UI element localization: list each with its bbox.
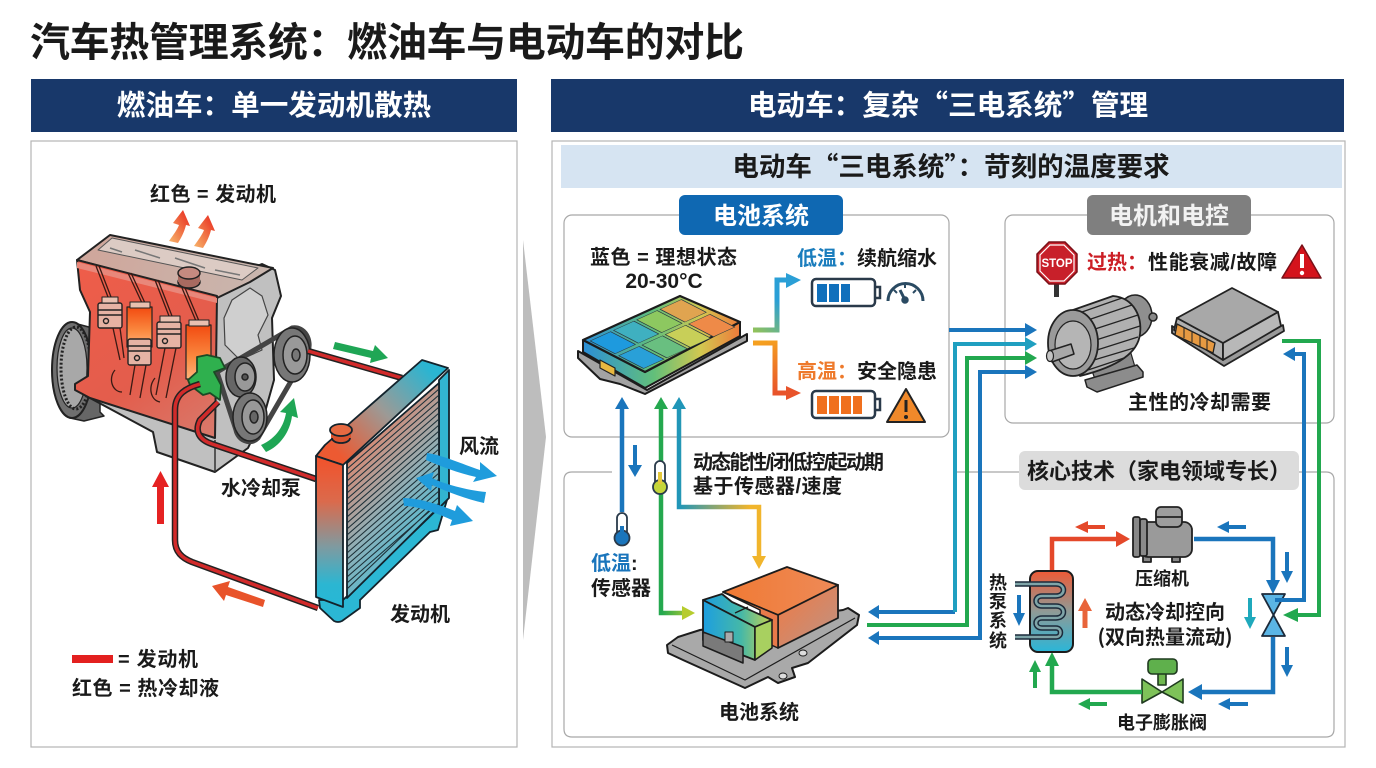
frame: core technology box: [564, 472, 1334, 737]
panel: motor and controller: [1005, 195, 1334, 423]
label: heat pump system: 热: [989, 573, 1007, 593]
label: heat pump system: 统: [989, 630, 1007, 651]
subheader: [561, 145, 1342, 188]
icon: reversing valve: [1262, 594, 1285, 636]
pill: core technology: 核心技术（家电领域专长）: [1027, 454, 1291, 486]
text: ideal state: 蓝色 = 理想状态: [590, 245, 737, 269]
text: high temperature: 高温：: [797, 359, 857, 383]
text: dynamic cooling direction: [1097, 600, 1233, 650]
subheader: 电动车“三电系统”：苛刻的温度要求: [732, 145, 1170, 184]
icon: overheated battery: [812, 391, 880, 418]
header: electric car: [551, 79, 1344, 132]
water pump green: [188, 355, 225, 400]
cylinders: [127, 307, 211, 379]
label: airflow: 风流: [459, 435, 499, 458]
pipe: green to heat exchanger: [1029, 652, 1142, 710]
belt: [217, 328, 309, 442]
label: radiator: 发动机: [390, 603, 450, 626]
arrows: battery to sensors: [615, 397, 766, 620]
text: main cooling need: 主性的冷却需要: [1128, 391, 1271, 414]
text: ideal state: 20-30°C: [625, 270, 703, 293]
icon: low battery: [812, 279, 880, 306]
text: overheating: [1087, 250, 1277, 274]
pipe: blue from compressor to valve: [1194, 521, 1293, 629]
arrows: bus lines between battery unit and motor: [867, 323, 1037, 645]
label: compressor: 压缩机: [1135, 568, 1189, 589]
illustration: motor: [1046, 295, 1157, 392]
text: high temperature: 安全隐患: [857, 359, 937, 383]
panel: battery system: [564, 195, 949, 437]
label: water pump: 水冷却泵: [221, 477, 301, 500]
pulleys: [226, 328, 310, 441]
label: heat pump system: [989, 573, 1007, 651]
text: overheating: 性能衰减/故障: [1148, 250, 1277, 274]
label: heat pump system: 系: [989, 610, 1007, 631]
text: low temperature sensor: 低温:: [591, 552, 638, 575]
pill: motor and controller: [1087, 195, 1251, 235]
icon: electronic expansion valve: [1142, 659, 1183, 703]
text: low temperature: 续航缩水: [857, 246, 937, 270]
illustration: engine: [52, 235, 310, 472]
engine block gray lower and end: [90, 264, 281, 472]
oil cap: [178, 267, 200, 288]
arrow: to low temperature: [753, 273, 801, 330]
text: dynamic control: 动态能性/闭低控/起动期: [693, 450, 884, 474]
label: expansion valve: 电子膨胀阀: [1117, 713, 1207, 733]
connecting rods and valves: [96, 266, 199, 402]
arrow: chevron between panels: [523, 240, 546, 640]
label: heat pump system: 泵: [989, 592, 1007, 612]
icon: compressor: [1133, 507, 1192, 562]
block cutaway red: [75, 260, 217, 438]
pipe: valve to expansion valve: [1188, 637, 1293, 710]
icon: thermometer blue: [614, 513, 630, 546]
panel: electric car: [552, 141, 1345, 747]
icon: heat arrows rising: [169, 210, 215, 248]
heat pump loop: [989, 341, 1319, 733]
legend: [72, 648, 219, 700]
pipes: controller loop: [1275, 341, 1319, 622]
icon: thermometer yellow: [653, 461, 667, 494]
label: battery system lower: 电池系统: [719, 700, 799, 724]
icon: stop sign: STOP: [1041, 258, 1073, 270]
text: low temperature: 低温：: [797, 247, 857, 270]
text: dynamic cooling direction: 动态冷却控向: [1105, 600, 1225, 624]
panel: fuel car engine cooling: [31, 141, 517, 747]
flywheel: [52, 322, 104, 421]
text: low temperature sensor: [591, 552, 651, 600]
pill: motor and controller: 电机和电控: [1109, 203, 1229, 230]
arrow: to high temperature: [753, 343, 801, 400]
text: ideal state: [590, 245, 737, 293]
header: fuel car: [31, 79, 517, 132]
text: dynamic control: 基于传感器/速度: [693, 475, 842, 498]
title: 汽车热管理系统：燃油车与电动车的对比: [30, 21, 744, 65]
legend: = 发动机: [118, 648, 198, 671]
pill: battery system: [679, 195, 843, 235]
icon: warning triangle: [887, 389, 925, 422]
arrows: airflow: [403, 453, 497, 526]
icon: gauge: [888, 284, 923, 302]
pistons: [98, 303, 181, 365]
label: red = engine (top): 红色 = 发动机: [150, 183, 276, 206]
pipe: red to compressor: [1052, 521, 1130, 572]
text: dynamic control: [693, 450, 884, 498]
arrows: coolant flow: [152, 342, 388, 607]
cam cover: [77, 235, 273, 298]
text: low temperature: [797, 246, 937, 270]
valve caps: [102, 297, 209, 326]
illustration: battery pack: [578, 296, 747, 394]
header: electric car: 电动车：复杂“三电系统”管理: [748, 83, 1148, 124]
legend: 红色 = 热冷却液: [72, 677, 219, 700]
icon: heat exchanger tank: [1015, 571, 1073, 652]
text: dynamic cooling direction: (双向热量流动): [1097, 621, 1233, 650]
radiator cap: [330, 424, 352, 443]
arrows: inside flow: [1013, 595, 1092, 628]
text: overheating: 过热：: [1087, 251, 1147, 274]
header: fuel car: 燃油车：单一发动机散热: [117, 90, 432, 122]
text: low temperature sensor: 传感器: [591, 577, 651, 600]
illustration: power electronics unit: [667, 567, 859, 688]
coolant pipes: [175, 351, 402, 608]
illustration: radiator: [316, 360, 449, 622]
illustration: controller: [1172, 288, 1284, 366]
icon: red warning: [1282, 245, 1321, 278]
icon: stop sign: [1037, 242, 1077, 297]
text: high temperature: [797, 359, 937, 383]
pill: battery system: 电池系统: [713, 203, 809, 230]
